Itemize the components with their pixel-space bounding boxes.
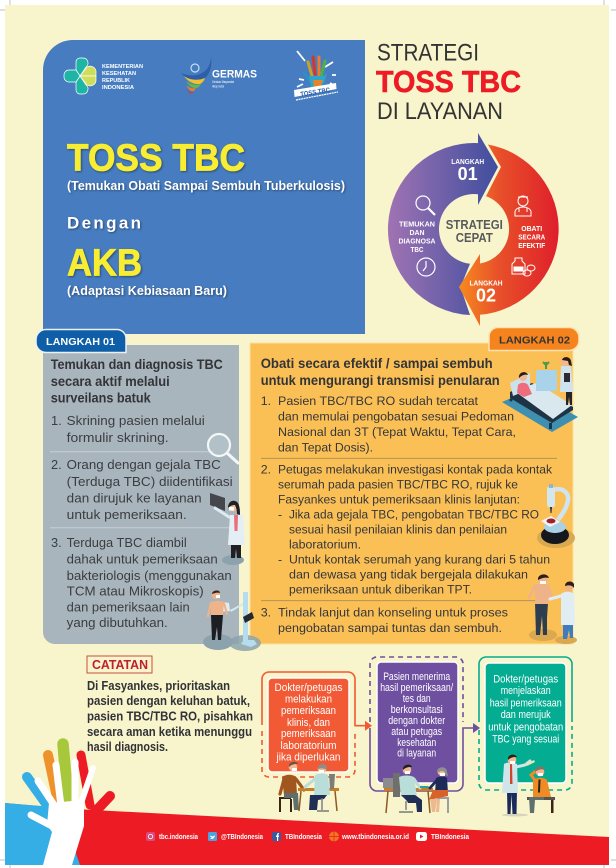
icon: twitter: [208, 832, 217, 841]
flow: three process steps: [262, 657, 572, 791]
heading: [51, 357, 223, 406]
label: temukan dan diagnosa: TEMUKAN: [399, 222, 435, 229]
list item 1: 1.: [261, 394, 271, 408]
logo text: Gerakan Masyarakat: [212, 80, 234, 84]
text: website: www.tbindonesia.or.id: [341, 834, 409, 841]
step 1 text: melakukan: [285, 694, 332, 706]
label box: CATATAN: [92, 657, 148, 672]
note: catatan: [87, 656, 253, 754]
label: langkah 01: LANGKAH: [451, 159, 484, 166]
logo text: [102, 64, 143, 91]
list item 3: Terduga TBC diambil: [67, 535, 187, 550]
subheading: TOSS TBC meaning: (Temukan Obati Sampai Sembuh Tuberkulosis): [67, 179, 345, 193]
list item 2: Orang dengan gejala TBC: [67, 457, 221, 472]
logo: GERMAS: [181, 56, 257, 94]
label: langkah 02: [470, 281, 502, 306]
list item 2: laboratorium.: [289, 538, 361, 552]
list item 1: formulir skrining.: [67, 430, 169, 445]
text: facebook page: TBIndonesia: [285, 834, 322, 841]
title: DI LAYANAN: [377, 98, 503, 125]
list item 1: dan Tepat Dosis).: [278, 441, 373, 455]
step 1 text: klinis, dan: [287, 717, 330, 729]
step 3 text: [488, 673, 563, 746]
step 2 text: Pasien menerima: [383, 671, 450, 683]
step 3 text: hasil pemeriksaan: [490, 698, 562, 710]
tab: langkah 01: LANGKAH 01: [46, 336, 115, 348]
list item 2: (Terduga TBC) diidentifikasi: [67, 474, 233, 489]
arrow: step 02 red: [459, 144, 559, 326]
illustration: doctor holding x-ray: [210, 493, 245, 565]
label: obati secara efektif: EFEKTIF: [518, 243, 546, 250]
step 3 text: TBC yang sesuai: [492, 734, 559, 746]
note text: pasien TBC/TBC RO, pisahkan: [87, 710, 253, 724]
list item 1: Skrining pasien melalui: [67, 413, 205, 428]
step 2 text: atau petugas: [391, 726, 442, 738]
illustration: raised hands: [27, 744, 110, 865]
label: obati secara efektif: [518, 226, 546, 250]
list item 3: 3.: [261, 606, 271, 620]
label: langkah 01: 01: [458, 164, 478, 184]
label: temukan dan diagnosa: DIAGNOSA: [398, 239, 436, 246]
label: obati secara efektif: OBATI: [521, 226, 542, 233]
label: langkah 01: [451, 159, 484, 184]
step 2 text: di layanan: [397, 748, 436, 760]
label: langkah 02: 02: [476, 286, 496, 306]
logo text: GERMAS: [212, 68, 257, 80]
logo text: REPUBLIK: [102, 78, 130, 84]
center label: CEPAT: [456, 231, 493, 245]
center label: STRATEGI: [446, 218, 503, 232]
note text: secara aman ketika menunggu: [87, 725, 252, 739]
illustration: microscope: [537, 484, 575, 548]
label: temukan dan diagnosa: DAN: [410, 230, 424, 237]
logo text: KEMENTERIAN: [102, 64, 143, 70]
tab: langkah 02: LANGKAH 02: [499, 334, 570, 346]
list item 2: [51, 457, 233, 522]
arrow: step 01 purple: [388, 133, 498, 315]
text: youtube channel: TBIndonesia: [431, 834, 469, 841]
icon: clock: [417, 258, 435, 276]
icon: medicine: [512, 258, 535, 276]
note text: Di Fasyankes, prioritaskan: [87, 679, 230, 693]
heading: untuk mengurangi transmisi penularan: [261, 373, 500, 388]
chart: circular strategy cycle: [388, 133, 559, 326]
logo text: KESEHATAN: [102, 71, 136, 77]
heading: Temukan dan diagnosis TBC: [51, 357, 223, 372]
list item 2: -: [278, 508, 282, 522]
list item 3: bakteriologis (menggunakan: [67, 568, 232, 583]
list item 2: 2.: [261, 462, 271, 476]
panel: langkah 02: [250, 343, 573, 644]
step 1 text: [274, 682, 342, 764]
title: TOSS TBC: [376, 64, 521, 99]
icon: large magnifier: [208, 434, 238, 463]
tab: langkah 01: [36, 330, 126, 352]
label: temukan dan diagnosa: [398, 222, 436, 254]
step 1 text: pemeriksaan: [281, 705, 336, 717]
list item 3: [51, 535, 232, 630]
list item 2: 2.: [51, 457, 62, 472]
illustration: patient with x-ray machine: [203, 590, 261, 651]
heading: TOSS TBC: TOSS TBC: [67, 138, 245, 180]
step 3 text: Dokter/petugas: [493, 673, 558, 685]
heading: AKB: AKB: [67, 243, 142, 285]
list item 2: [261, 462, 553, 597]
logo: TOSS TBC: [294, 51, 338, 100]
list item 3: 3.: [51, 535, 62, 550]
subheading: AKB meaning: (Adaptasi Kebiasaan Baru): [67, 284, 227, 298]
list item 3: Tindak lanjut dan konseling untuk proses: [278, 606, 508, 620]
list item 2: dan dirujuk ke layanan: [67, 491, 202, 506]
list item 2: sesuai hasil penilaian klinis dan penilaian: [289, 523, 507, 537]
list item 1: Pasien TBC/TBC RO sudah tercatat: [278, 394, 479, 408]
step 2 text: [380, 671, 453, 760]
logo text: [212, 68, 257, 88]
icon: facebook: [272, 832, 281, 841]
heading: [261, 356, 500, 388]
step 2 text: tes dan: [403, 693, 431, 705]
step 2: pasien menerima hasil: [370, 657, 480, 791]
icon: youtube: [416, 832, 427, 841]
logo text: Hidup Sehat: [212, 84, 224, 88]
list item 3: yang dibutuhkan.: [67, 615, 168, 630]
logo: Kementerian Kesehatan: [64, 58, 143, 94]
logo: TOSS TBC: TOSS TBC: [300, 87, 331, 99]
panel: header blue: [43, 40, 365, 334]
list item 3: dan pemeriksaan lain: [67, 600, 190, 615]
illustration: blood pressure check: [279, 762, 339, 812]
illustration: doctor explaining to patient: [502, 755, 555, 816]
list item 3: pengobatan sampai tuntas dan sembuh.: [278, 621, 502, 635]
step 3 text: dan merujuk: [501, 709, 551, 721]
text: twitter handle: @TBIndonesia: [221, 834, 263, 841]
step 2 text: dengan dokter: [388, 715, 446, 727]
list item 2: dan dewasa yang tidak bergejala dilakukan: [289, 568, 528, 582]
note text: hasil diagnosis.: [87, 740, 168, 754]
step 3: dokter menjelaskan hasil: [479, 657, 572, 790]
illustration: patient and doctor consulting: [529, 574, 577, 644]
heading: Obati secara efektif / sampai sembuh: [261, 356, 493, 371]
center label: [446, 218, 503, 245]
list item 2: pemeriksaan untuk diberikan TPT.: [289, 583, 472, 597]
footer band: [5, 803, 609, 865]
list item 2: Untuk kontak serumah yang kurang dari 5 tahun: [289, 553, 550, 567]
title: STRATEGI: [377, 40, 479, 67]
step 2 text: berkonsultasi: [391, 704, 443, 716]
list item 2: Petugas melakukan investigasi kontak pada kontak: [278, 462, 553, 476]
list item 2: untuk pemeriksaan.: [67, 507, 187, 522]
step 3 text: menjelaskan: [501, 685, 551, 697]
icon: doctor: [515, 196, 531, 216]
list item 2: serumah pada pasien TBC/TBC RO, rujuk ke: [278, 478, 518, 492]
icon: instagram: [146, 832, 155, 841]
text: Dengan: Dengan: [67, 214, 141, 233]
note text: pasien dengan keluhan batuk,: [87, 694, 250, 708]
panel: langkah 01: [43, 345, 239, 644]
heading: secara aktif melalui: [51, 374, 170, 389]
step 2 text: kesehatan: [397, 737, 436, 749]
list item 1: 1.: [51, 413, 62, 428]
label: temukan dan diagnosa: TBC: [410, 247, 424, 254]
step 1 text: pemeriksaan: [281, 728, 336, 740]
list item 2: -: [278, 553, 282, 567]
heading: surveilans batuk: [51, 391, 151, 406]
icon: magnifier: [416, 196, 435, 215]
step 1 text: jika diperlukan: [276, 752, 341, 764]
list item 1: [261, 394, 516, 455]
step 1: dokter melakukan pemeriksaan: [262, 672, 372, 777]
list item 3: dahak untuk pemeriksaan: [67, 552, 218, 567]
list item 1: Nasional dan 3T (Tepat Waktu, Tepat Cara,: [278, 425, 516, 439]
note text: [87, 679, 253, 754]
label: obati secara efektif: SECARA: [518, 234, 545, 241]
step 1 text: Dokter/petugas: [274, 682, 342, 694]
illustration: doctor consulting patient: [383, 765, 449, 813]
text: instagram handle: tbc.indonesia: [159, 834, 198, 841]
footer: social media links: [146, 832, 469, 842]
step 3 text: untuk pengobatan: [488, 722, 563, 734]
illustration: patient in bed with nurse: [502, 357, 578, 432]
list item 2: Jika ada gejala TBC, pengobatan TBC/TBC RO: [289, 508, 539, 522]
title: [376, 40, 521, 125]
step 1 text: laboratorium: [280, 740, 337, 752]
label: langkah 02: LANGKAH: [470, 281, 502, 288]
tab: langkah 02: [489, 328, 579, 350]
list item 3: TCM atau Mikroskopis): [67, 584, 204, 599]
icon: website globe: [329, 832, 339, 842]
list item 1: [51, 413, 205, 445]
step 2 text: hasil pemeriksaan/: [380, 682, 453, 694]
list item 3: [261, 606, 508, 635]
list item 1: dan memulai pengobatan sesuai Pedoman: [278, 410, 514, 424]
logo text: INDONESIA: [102, 85, 134, 91]
list item 2: Fasyankes untuk pemeriksaan klinis lanjutan:: [278, 493, 520, 507]
